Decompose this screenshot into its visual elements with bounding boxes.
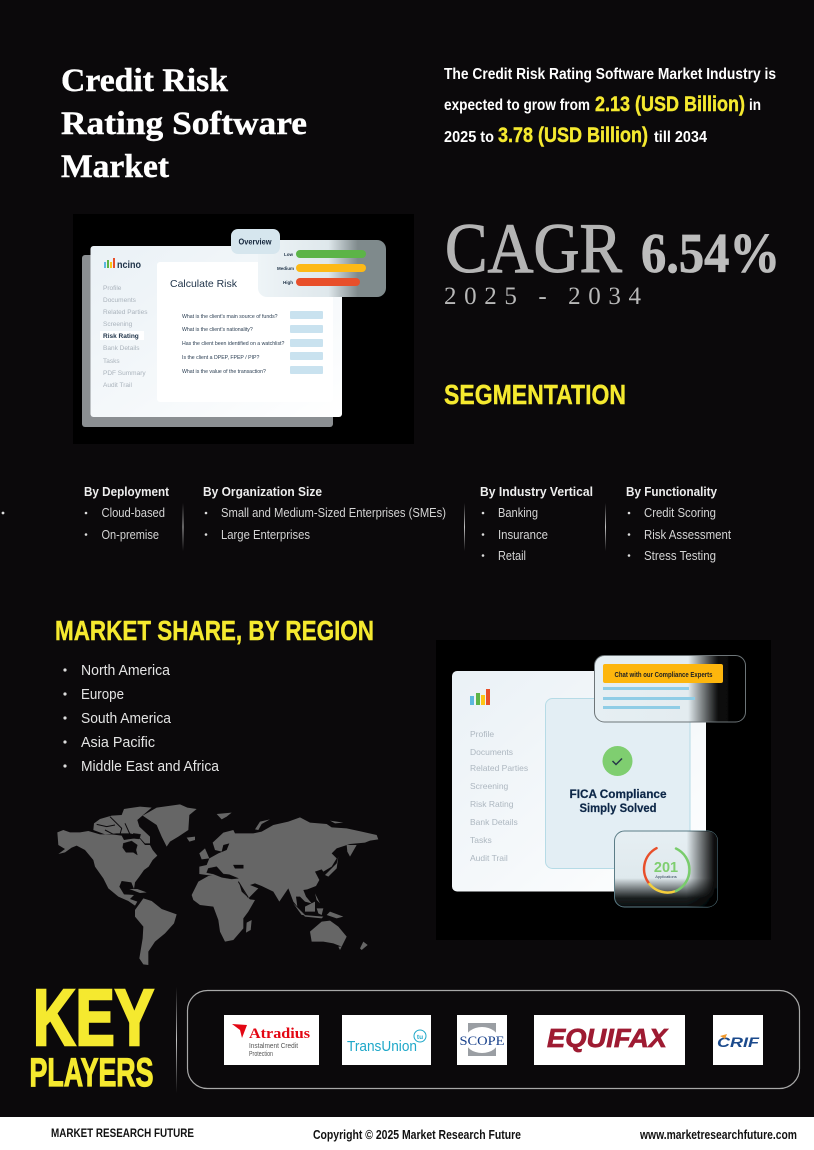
segment: by industry vertical: By Industry Vertical <box>480 484 593 499</box>
mockup contents <box>452 656 746 907</box>
map: Mediterranean, Black Sea and Red Sea <box>207 865 248 898</box>
sidebar menu: Risk Rating <box>103 333 139 340</box>
sidebar menu <box>470 729 528 863</box>
region list: North America <box>81 662 171 679</box>
applications ring panel: 201 <box>654 860 678 876</box>
segment: by organization size: Large Enterprises <box>221 528 310 542</box>
segment: by organization size: By Organization Size <box>203 484 322 499</box>
world map <box>57 804 378 965</box>
map: Americas and Greenland <box>57 804 197 965</box>
logo: Atradius <box>224 1015 319 1065</box>
market forecast text: expected to grow from <box>444 97 590 114</box>
main card <box>90 246 342 417</box>
main card <box>452 671 706 892</box>
FICA heading: Simply Solved <box>580 803 656 815</box>
key players heading: KEY <box>33 973 154 1062</box>
segment: by industry vertical: Banking <box>498 506 538 520</box>
map: Eurasia, Africa and Oceania <box>192 813 378 950</box>
map: Canadian bays and channels <box>97 817 141 855</box>
segment: by deployment: By Deployment <box>84 484 170 499</box>
CAGR figure: 6.54% <box>641 223 780 285</box>
bar logo <box>470 689 490 705</box>
market forecast text: till 2034 <box>654 129 707 146</box>
footer: copyright: Copyright © 2025 Market Research Future <box>313 1128 521 1142</box>
region list <box>63 662 220 775</box>
key players heading: PLAYERS <box>30 1051 154 1095</box>
footer: brand: MARKET RESEARCH FUTURE <box>51 1126 194 1140</box>
sidebar menu: Related Parties <box>103 309 148 316</box>
CAGR figure: CAGR <box>445 210 623 288</box>
panel: credit risk software mockup <box>73 214 414 444</box>
market share heading: MARKET SHARE, BY REGION <box>55 615 374 646</box>
segment: by functionality: Credit Scoring <box>644 506 716 520</box>
segment: by functionality <box>626 484 731 563</box>
logo: Atradius: Protection <box>249 1049 273 1058</box>
risk questions: Is the client a DPEP, FPEP / PIP? <box>182 355 259 361</box>
mockup contents <box>82 229 386 427</box>
region list: Middle East and Africa <box>81 758 220 775</box>
sidebar menu: Screening <box>470 781 509 791</box>
key players box <box>188 990 800 1088</box>
sidebar menu: PDF Summary <box>103 370 146 377</box>
logo: Equifax <box>534 1015 685 1065</box>
risk questions: What is the client's nationality? <box>182 327 253 333</box>
market forecast text: 2025 to <box>444 129 494 146</box>
ncino logo: ncino <box>117 260 141 271</box>
title: Market <box>61 149 169 185</box>
segmentation heading: SEGMENTATION <box>444 379 626 410</box>
risk questions: Has the client been identified on a watchlist? <box>182 341 284 347</box>
market forecast text: 2.13 (USD Billion) <box>595 93 745 116</box>
title: Credit Risk <box>61 63 229 99</box>
back card <box>82 255 333 427</box>
segment: by deployment: Cloud-based <box>102 506 165 520</box>
logo: CRIF: CRIF <box>717 1035 760 1050</box>
logo: Atradius: Instalment Credit <box>249 1041 299 1050</box>
overview panel <box>231 229 386 297</box>
applications ring panel: Applications <box>655 874 677 879</box>
sidebar menu: Audit Trail <box>470 853 508 863</box>
stray bullet <box>2 512 4 514</box>
chat panel: Chat with our Compliance Experts <box>614 672 713 679</box>
sidebar menu: Audit Trail <box>103 382 132 389</box>
segment: by industry vertical: Retail <box>498 549 526 563</box>
logo: TransUnion: tu <box>417 1034 423 1041</box>
segment: by deployment: On-premise <box>102 528 159 542</box>
sidebar menu: Risk Rating <box>470 799 514 809</box>
segment: by organization size <box>203 484 446 542</box>
sidebar menu: Tasks <box>470 835 492 845</box>
CAGR figure <box>444 210 780 310</box>
region list: South America <box>81 710 172 727</box>
logo: Scope: SCOPE <box>460 1033 505 1048</box>
CAGR figure: 2025 - 2034 <box>444 283 642 310</box>
FICA card <box>546 698 690 868</box>
footer bar <box>0 1117 814 1150</box>
overview panel: High <box>283 280 293 285</box>
region list: Asia Pacific <box>81 734 155 751</box>
overview panel: Overview <box>238 238 272 246</box>
logo: TransUnion: TransUnion <box>347 1039 417 1055</box>
logo: Equifax: EQUIFAX <box>547 1023 669 1053</box>
sidebar menu: Documents <box>103 297 137 304</box>
sidebar menu: Related Parties <box>470 763 528 773</box>
calculate risk heading: Calculate Risk <box>170 278 238 290</box>
ncino logo <box>104 258 141 271</box>
FICA heading <box>570 789 666 815</box>
segment: by industry vertical <box>480 484 593 563</box>
segment: by functionality: By Functionality <box>626 484 718 499</box>
sidebar menu: Bank Details <box>470 817 518 827</box>
sidebar menu: Tasks <box>103 358 120 365</box>
overview panel: Low <box>284 252 293 257</box>
sidebar menu: Profile <box>103 285 122 292</box>
FICA heading: FICA Compliance <box>570 789 666 801</box>
logo: CRIF <box>713 1015 763 1065</box>
market forecast text <box>444 66 776 147</box>
market forecast text: in <box>749 97 761 114</box>
market forecast text: 3.78 (USD Billion) <box>498 124 648 147</box>
sidebar menu: Screening <box>103 321 133 328</box>
chat panel <box>594 656 746 722</box>
logo: Atradius: Atradius <box>249 1026 310 1042</box>
title: Rating Software <box>61 106 307 142</box>
risk questions: What is the value of the transaction? <box>182 369 266 375</box>
check icon <box>602 746 632 776</box>
region list: Europe <box>81 686 124 703</box>
sidebar menu: Profile <box>470 729 494 739</box>
segment: by organization size: Small and Medium-Sized Enterprises (SMEs) <box>221 506 446 520</box>
sidebar menu: Bank Details <box>103 345 140 352</box>
segment: by industry vertical: Insurance <box>498 528 548 542</box>
sidebar menu <box>100 285 148 389</box>
segment: by functionality: Risk Assessment <box>644 528 731 542</box>
sidebar menu: Documents <box>470 747 513 757</box>
applications ring panel <box>614 831 718 907</box>
segment: by functionality: Stress Testing <box>644 549 716 563</box>
segment: by deployment <box>84 484 170 542</box>
overview panel: Medium <box>277 266 294 271</box>
risk questions <box>182 311 323 375</box>
title <box>61 63 307 185</box>
risk questions: What is the client's main source of funds? <box>182 314 278 320</box>
logo: TransUnion <box>342 1015 431 1065</box>
logo: Scope <box>457 1015 507 1065</box>
calculate risk card <box>157 262 333 402</box>
key players heading <box>30 973 154 1095</box>
panel: compliance software mockup <box>436 640 771 940</box>
